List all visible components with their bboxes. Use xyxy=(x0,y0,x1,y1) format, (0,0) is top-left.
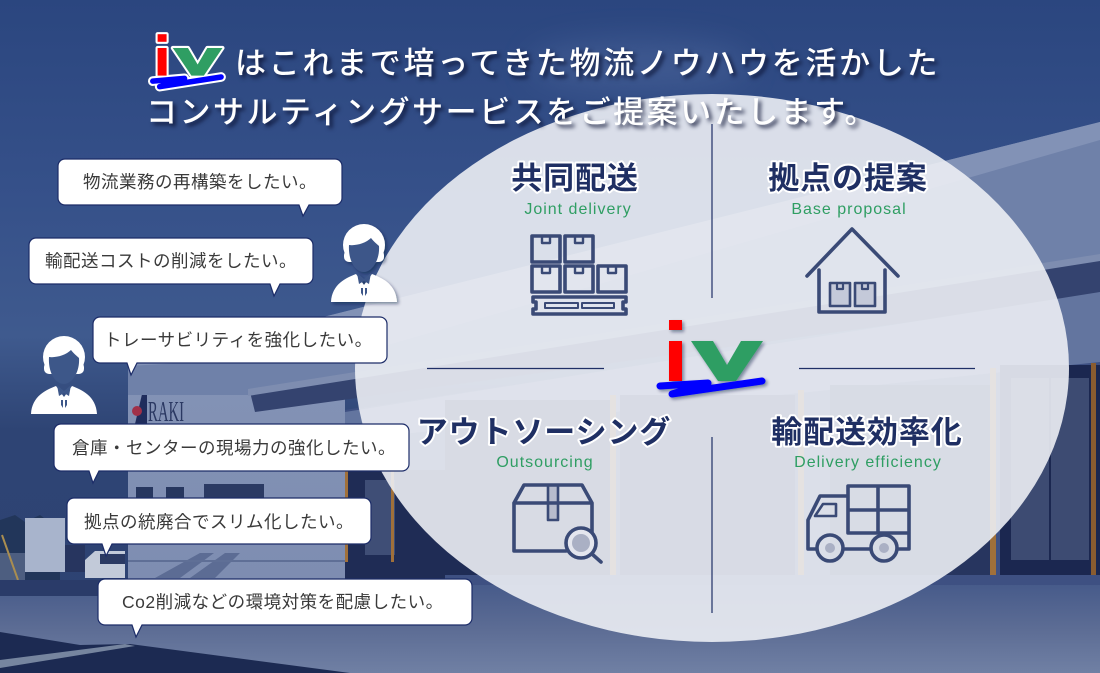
icon: box with magnifier xyxy=(514,485,601,562)
heading: 共同配送 xyxy=(511,161,639,196)
icon: person right xyxy=(331,224,397,302)
building sign: RAKI xyxy=(148,397,184,428)
section: outsourcing xyxy=(417,415,671,562)
english label: Outsourcing xyxy=(496,454,594,471)
icon: pallet of boxes xyxy=(532,236,626,314)
section: base proposal xyxy=(768,161,928,312)
title line 1 with small logo xyxy=(153,34,940,87)
heading: アウトソーシング xyxy=(417,415,671,450)
speech bubble 4: 倉庫・センターの現場力の強化したい。 xyxy=(72,438,396,458)
speech bubble 6 xyxy=(98,579,472,637)
delivery truck in the background xyxy=(25,518,65,572)
speech bubble 5 xyxy=(67,498,371,556)
office wall xyxy=(128,345,345,580)
dock wall xyxy=(345,296,1100,585)
english label: Delivery efficiency xyxy=(794,454,942,471)
dock building upper wall xyxy=(128,122,1100,395)
icon: person left xyxy=(31,336,97,414)
english label: Base proposal xyxy=(791,201,907,218)
speech bubble 4 xyxy=(54,424,409,483)
speech bubble 5: 拠点の統廃合でスリム化したい。 xyxy=(84,512,354,532)
speech bubble 3: トレーサビリティを強化したい。 xyxy=(104,330,373,350)
speech bubble 1 xyxy=(58,159,342,216)
icon: warehouse house xyxy=(807,229,898,312)
title line 1 with small logo: はこれまで培ってきた物流ノウハウを活かした xyxy=(235,46,940,81)
building sign xyxy=(132,390,184,428)
speech bubble 3 xyxy=(93,317,387,375)
speech bubble 6: Co2削減などの環境対策を配慮したい。 xyxy=(122,592,444,612)
speech bubble 1: 物流業務の再構築をしたい。 xyxy=(83,172,317,192)
english label: Joint delivery xyxy=(524,201,632,218)
ground xyxy=(0,583,1100,673)
canopy xyxy=(250,258,1100,412)
section: delivery efficiency xyxy=(771,415,963,561)
small iv logo xyxy=(153,34,222,87)
heading: 拠点の提案 xyxy=(768,161,928,196)
title line 2: コンサルティングサービスをご提案いたします。 xyxy=(146,95,878,130)
divider lines xyxy=(427,124,975,613)
center iv logo xyxy=(660,320,763,394)
icon: truck xyxy=(808,486,909,561)
translucent circle panel xyxy=(355,94,1069,642)
trees xyxy=(0,515,60,580)
section: joint delivery xyxy=(511,161,639,314)
speech bubble 2: 輸配送コストの削減をしたい。 xyxy=(45,251,297,271)
heading: 輸配送効率化 xyxy=(771,415,963,450)
speech bubble 2 xyxy=(29,238,313,296)
